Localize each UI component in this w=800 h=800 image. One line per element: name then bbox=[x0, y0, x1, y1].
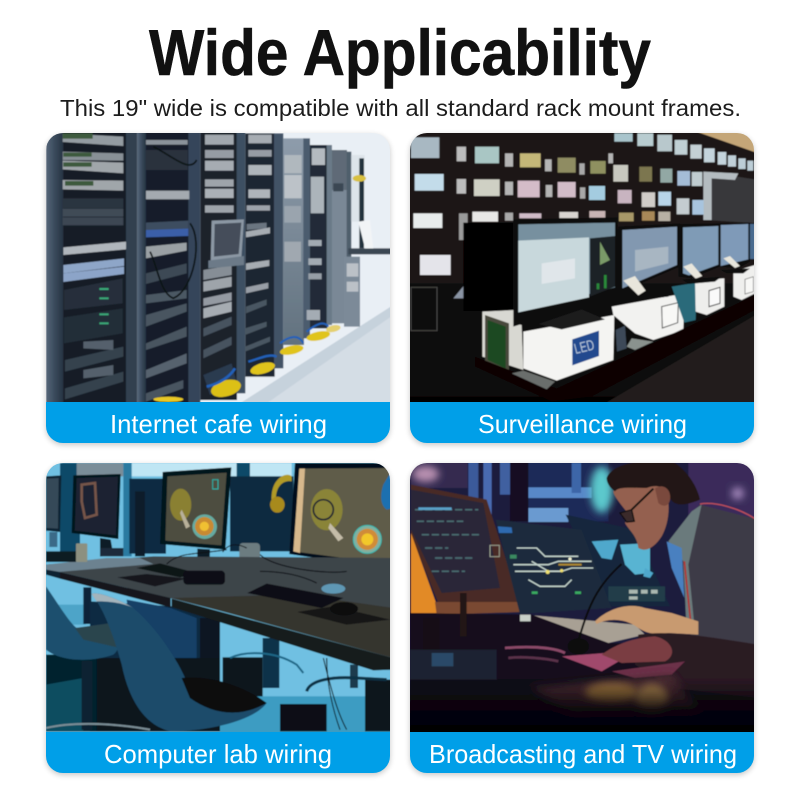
label band: Computer lab wiring bbox=[104, 739, 332, 769]
large monitor bbox=[288, 463, 390, 559]
cable box bbox=[238, 542, 261, 558]
blurred background displays bbox=[411, 458, 758, 522]
rack 1 servers bbox=[63, 133, 126, 399]
keyboards and mice bbox=[46, 543, 390, 625]
man's head bbox=[607, 461, 700, 550]
monitor left edge bbox=[46, 475, 61, 532]
label band bbox=[410, 732, 754, 773]
label band bbox=[410, 402, 754, 443]
back monitors bbox=[129, 475, 293, 556]
left laptop bbox=[411, 485, 522, 615]
photo: server racks bbox=[40, 130, 393, 443]
centre monitor with network diagram bbox=[496, 520, 612, 614]
rack 4 servers bbox=[245, 135, 277, 377]
panel: broadcasting and tv wiring bbox=[405, 458, 758, 775]
label band bbox=[46, 402, 390, 443]
label band bbox=[46, 732, 390, 773]
wall-mounted monitors bbox=[411, 133, 753, 331]
chairs bbox=[46, 586, 267, 731]
photo: computer lab bbox=[40, 458, 393, 773]
black shelf ledge bbox=[475, 295, 755, 402]
monitor 3 bbox=[160, 467, 231, 570]
photo: monitor showroom bbox=[405, 130, 758, 443]
microphone bbox=[568, 564, 622, 654]
panel: computer lab wiring bbox=[40, 458, 393, 775]
rack 3 servers bbox=[203, 135, 243, 400]
dark display stand bbox=[463, 223, 513, 311]
cables bbox=[167, 545, 347, 730]
label band: Broadcasting and TV wiring bbox=[429, 739, 737, 769]
television row bbox=[513, 217, 755, 329]
man's torso bbox=[667, 503, 758, 648]
label band: Internet cafe wiring bbox=[110, 409, 327, 439]
console equipment bbox=[410, 593, 565, 680]
hands and keyboard bbox=[562, 606, 758, 698]
label band: Surveillance wiring bbox=[478, 409, 687, 439]
panel: internet cafe wiring bbox=[40, 130, 393, 445]
monitor 2 bbox=[72, 474, 123, 556]
title: Wide Applicability bbox=[149, 17, 651, 90]
desks bbox=[46, 556, 393, 670]
white display boxes: LED bbox=[573, 338, 596, 358]
rack 5-8 server detail bbox=[279, 148, 366, 357]
icon: fold-out console monitor bbox=[208, 219, 244, 268]
blurred foreground reflection bbox=[532, 675, 698, 715]
rack 2 servers bbox=[146, 140, 197, 402]
subtitle: This 19" wide is compatible with all standard rack mount frames. bbox=[60, 95, 741, 121]
white display boxes bbox=[482, 265, 755, 381]
desk surface bbox=[533, 615, 645, 643]
under-desk furniture bbox=[46, 587, 393, 733]
photo: broadcast control room bbox=[405, 458, 758, 773]
right monitor with world map bbox=[566, 515, 670, 606]
panel: surveillance wiring bbox=[405, 130, 758, 445]
